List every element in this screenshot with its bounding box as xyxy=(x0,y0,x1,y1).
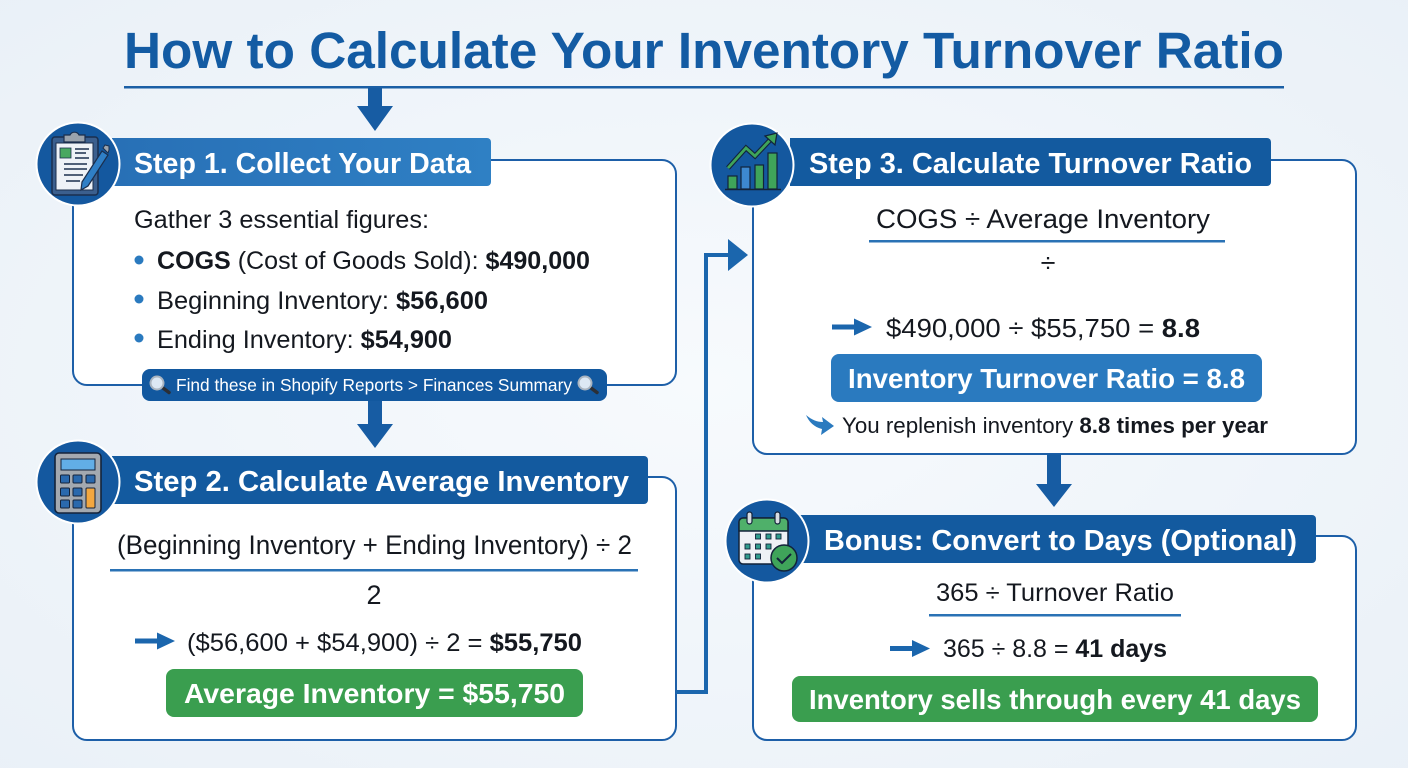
formula: average inventory xyxy=(110,530,638,610)
calculation: average inventory: ($56,600 + $54,900) ÷ 2 = $55,750 xyxy=(187,629,582,657)
step 1 header xyxy=(112,138,491,186)
step 3 header: Step 3. Calculate Turnover Ratio xyxy=(809,148,1252,180)
step 3 header xyxy=(790,138,1271,186)
arrow: step 2 to step 3 connector xyxy=(676,239,748,692)
bonus header: Bonus: Convert to Days (Optional) xyxy=(824,525,1297,557)
bonus header xyxy=(800,515,1316,563)
list: essential figures: Beginning Inventory: $56,600 xyxy=(157,287,488,315)
calculation: days: 365 ÷ 8.8 = 41 days xyxy=(943,635,1167,663)
formula: average inventory: (Beginning Inventory + Ending Inventory) ÷ 2 xyxy=(117,530,632,560)
list: essential figures xyxy=(134,247,590,354)
note: replenishment: You replenish inventory 8.8 times per year xyxy=(842,413,1268,438)
title: How to Calculate Your Inventory Turnover Ratio xyxy=(124,22,1284,79)
arrow: step 1 to step 2 xyxy=(357,401,393,448)
step 2 header xyxy=(112,456,648,504)
icon: calculator xyxy=(36,440,120,524)
callout: where to find figures: Find these in Shopify Reports > Finances Summary xyxy=(176,375,572,395)
result: inventory turnover ratio xyxy=(831,354,1262,402)
result: average inventory xyxy=(166,669,583,717)
arrow: title to step 1 xyxy=(357,88,393,131)
formula: turnover ratio: COGS ÷ Average Inventory xyxy=(876,204,1211,234)
icon: magnifier left xyxy=(150,376,169,392)
callout: where to find figures xyxy=(142,369,607,401)
icon: arrow xyxy=(890,640,930,657)
icon: magnifier right xyxy=(578,376,597,392)
arrow: step 3 to bonus xyxy=(1036,454,1072,507)
text: intro: Gather 3 essential figures: xyxy=(134,206,429,234)
icon: curved arrow xyxy=(806,415,834,435)
icon: clipboard and pen xyxy=(36,122,120,206)
result: days xyxy=(792,676,1318,722)
panel: step 3 calculate turnover ratio xyxy=(710,122,1356,454)
list: essential figures: COGS (Cost of Goods Sold): $490,000 xyxy=(157,247,590,275)
panel: bonus convert to days xyxy=(724,498,1356,740)
icon: arrow xyxy=(832,318,872,336)
panel: step 2 calculate average inventory xyxy=(36,440,676,740)
icon: rising bar chart xyxy=(710,122,794,208)
step 1 header: Step 1. Collect Your Data xyxy=(134,148,472,180)
formula: turnover ratio: ÷ xyxy=(1041,248,1055,278)
result: inventory turnover ratio: Inventory Turnover Ratio = 8.8 xyxy=(848,363,1245,394)
icon: calendar with check xyxy=(724,498,810,584)
formula: days: 365 ÷ Turnover Ratio xyxy=(936,579,1174,607)
formula: turnover ratio xyxy=(869,204,1225,278)
result: days: Inventory sells through every 41 days xyxy=(809,684,1301,715)
list: essential figures: Ending Inventory: $54,900 xyxy=(157,326,452,354)
result: average inventory: Average Inventory = $55,750 xyxy=(184,678,565,709)
step 2 header: Step 2. Calculate Average Inventory xyxy=(134,466,629,498)
formula: average inventory: 2 xyxy=(366,580,382,610)
icon: arrow xyxy=(135,632,175,650)
panel: step 1 collect your data xyxy=(36,122,676,401)
calculation: turnover ratio: $490,000 ÷ $55,750 = 8.8 xyxy=(886,313,1200,343)
